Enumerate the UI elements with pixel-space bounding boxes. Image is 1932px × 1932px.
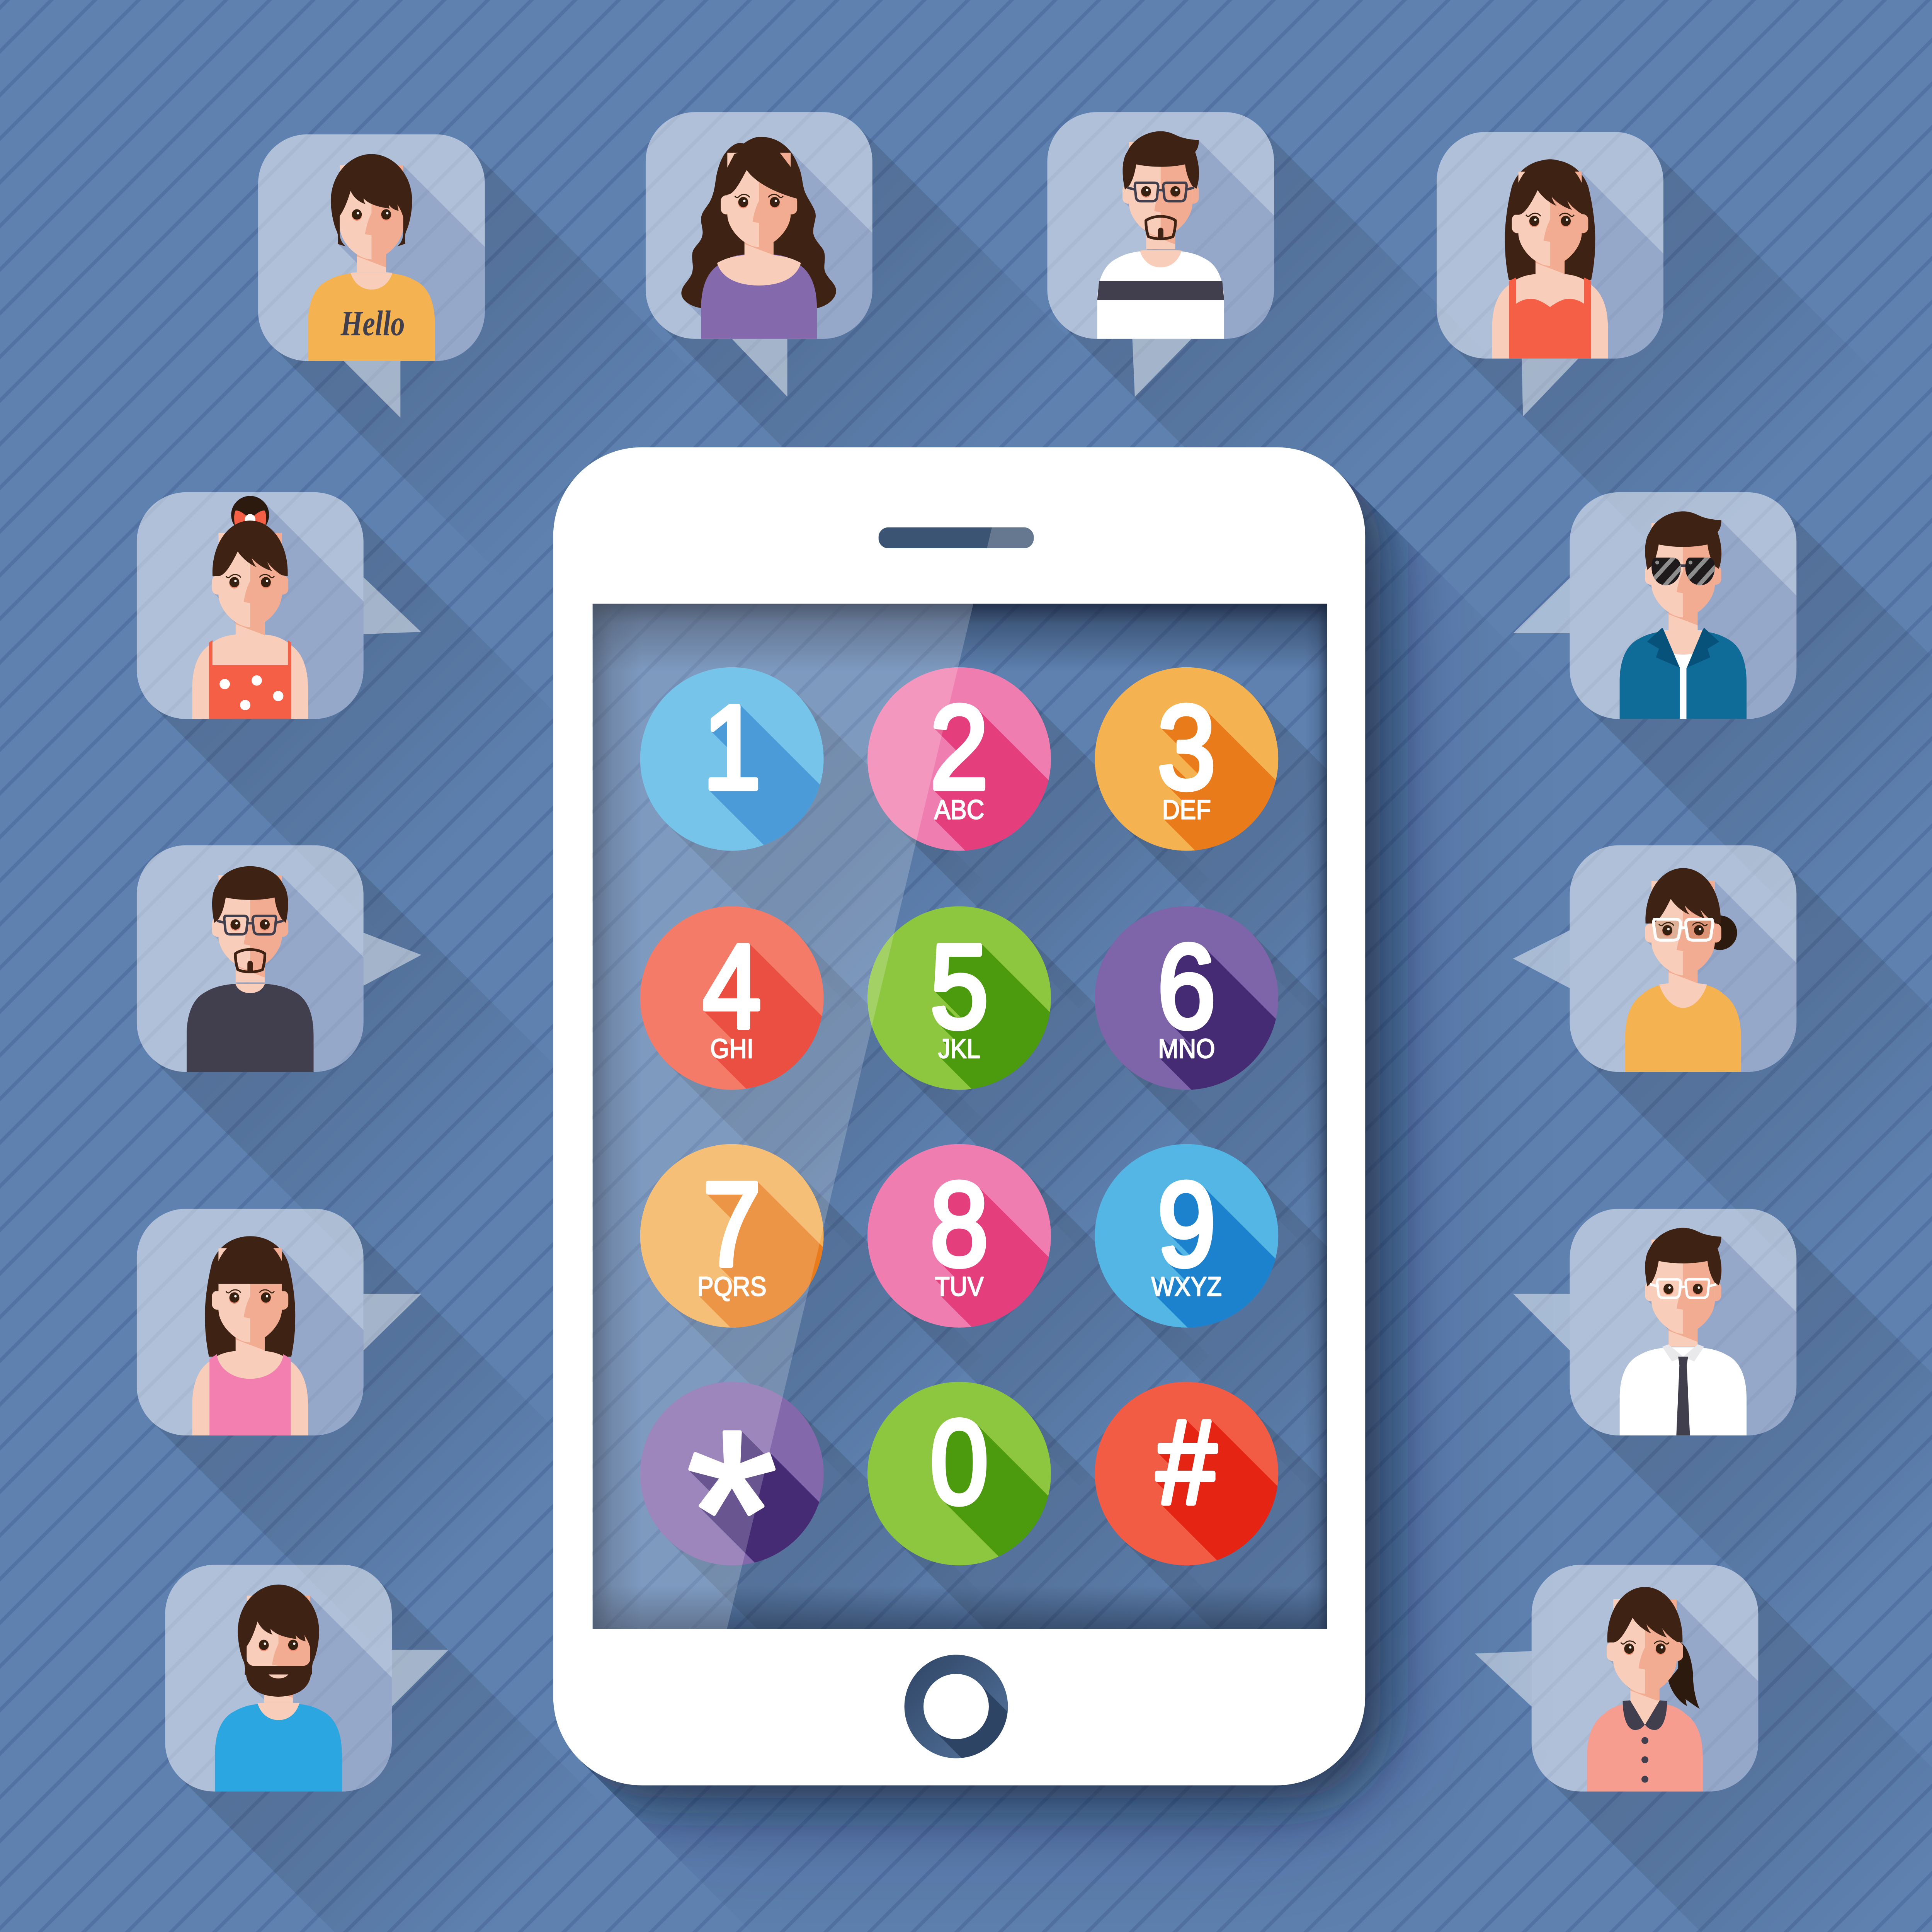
avatar: woman with ponytail and coral blouse [1587,1587,1703,1791]
panel: contact bubble, top row 4 [1437,132,1883,578]
keypad button 7 PQRS [640,1144,824,1328]
keypad button 1 [640,667,824,851]
keypad button 9 WXYZ [1095,1144,1278,1328]
keypad button star: * [686,1382,777,1643]
panel: contact bubble, top row 2 [646,112,1092,558]
keypad button 8 TUV [867,1144,1051,1328]
keypad button star [640,1382,824,1643]
screen [593,604,1436,1723]
speaker slot [879,527,1034,548]
keypad button 6 MNO: MNO [1158,1034,1215,1064]
avatar: person in yellow Hello shirt [308,154,435,361]
keypad button 9 WXYZ: 9 [1157,1157,1216,1291]
keypad button 7 PQRS: PQRS [697,1272,767,1302]
keypad button 8 TUV: 8 [930,1157,988,1291]
panel: contact bubble, top row 3 [1047,112,1494,558]
keypad button 3 DEF: 3 [1157,680,1216,814]
avatar: man with glasses, white shirt and dark tie [1620,1228,1747,1435]
keypad button 4 GHI: GHI [710,1034,753,1064]
panel: contact bubble, left column 3 [137,1209,583,1655]
panel: contact bubble, top row 1 [258,134,643,519]
keypad button 2 ABC: ABC [934,795,984,825]
avatar: woman with side bun, white glasses and yellow top [1625,868,1741,1072]
avatar: bearded man in blue shirt [215,1585,342,1791]
avatar: woman with bangs and pink top [192,1236,308,1435]
keypad button hash: # [1156,1396,1217,1529]
keypad button hash [1095,1382,1278,1565]
keypad button 7 PQRS: 7 [702,1157,761,1291]
keypad button 2 ABC: 2 [930,680,988,814]
keypad button 5 JKL: JKL [938,1034,980,1064]
panel: smartphone [553,447,1436,1853]
keypad button 6 MNO: 6 [1157,919,1216,1053]
panel: contact bubble, right column 2 [1513,845,1932,1292]
avatar: woman with wavy hair and purple top [681,137,836,339]
avatar: woman with hair bun, bow and polka dot dress [192,496,308,719]
keypad button 0 [867,1382,1051,1565]
keypad button 2 ABC [867,667,1051,851]
avatar: man with glasses, goatee and dark sweater [187,866,314,1072]
panel: contact bubble, left column 1 [137,492,583,939]
keypad button 4 GHI [640,906,824,1090]
keypad button 4 GHI: 4 [702,919,761,1053]
avatar: man with sunglasses and teal jacket [1620,511,1747,719]
keypad button 3 DEF [1095,667,1278,851]
panel: contact bubble, right column 1 [1513,492,1932,939]
keypad button 5 JKL: 5 [930,919,988,1053]
screen glare [593,604,973,1629]
keypad button 8 TUV: TUV [935,1272,984,1302]
keypad button 6 MNO [1095,906,1278,1090]
keypad button 5 JKL [867,906,1051,1090]
panel: contact bubble, right column 3 [1513,1209,1932,1655]
avatar: man with glasses, goatee and striped shirt [1097,131,1224,339]
keypad button 1: 1 [702,680,761,814]
keypad button 3 DEF: DEF [1162,795,1211,825]
panel: contact bubble, left column 4 [165,1565,612,1932]
home button [905,1655,1102,1853]
avatar: person in yellow Hello shirt: Hello [340,304,405,343]
keypad button 0: 0 [930,1395,988,1529]
keypad button 9 WXYZ: WXYZ [1151,1272,1222,1302]
avatar: woman with long hair and red dress [1492,159,1608,359]
panel: contact bubble, left column 2 [137,845,583,1292]
panel: contact bubble, right column 4 [1475,1565,1932,1932]
